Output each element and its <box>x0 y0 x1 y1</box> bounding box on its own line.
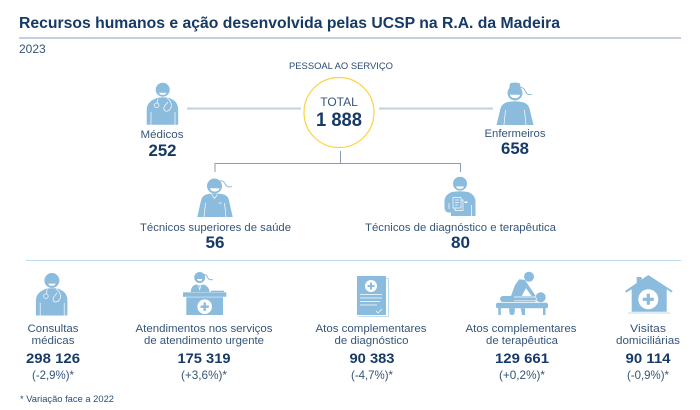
node: médicos: Médicos <box>140 129 184 141</box>
panel: atos complementares de terapêutica: de terapêutica <box>486 335 559 347</box>
node: técnicos de diagnóstico e terapêutica: 80 <box>451 233 470 252</box>
panel: atos complementares de diagnóstico: (-4,7%)* <box>351 368 393 382</box>
panel: atendimentos urgentes: 175 319 <box>178 350 231 366</box>
panel: consultas médicas: 298 126 <box>26 350 80 366</box>
panel: atendimentos urgentes <box>136 272 273 382</box>
node: médicos: 252 <box>148 141 176 160</box>
panel: atos complementares de diagnóstico: de diagnóstico <box>334 335 408 347</box>
panel: atos complementares de diagnóstico <box>316 276 427 382</box>
panel: visitas domiciliárias: domiciliárias <box>616 335 681 347</box>
panel: atendimentos urgentes: Atendimentos nos serviços <box>136 323 273 335</box>
node: enfermeiros: Enfermeiros <box>484 128 546 140</box>
icon: doctor <box>36 273 67 316</box>
panel: atos complementares de terapêutica: 129 661 <box>495 350 549 366</box>
node: técnicos superiores de saúde <box>140 178 291 252</box>
panel: consultas médicas <box>26 273 80 382</box>
node: técnicos de diagnóstico e terapêutica: Técnicos de diagnóstico e terapêutica <box>365 222 557 234</box>
icon: medical report <box>357 276 388 316</box>
total circle <box>304 78 374 148</box>
total circle: TOTAL <box>320 95 358 109</box>
node: enfermeiros <box>484 83 546 158</box>
node: técnicos superiores de saúde: 56 <box>206 233 224 252</box>
node: técnicos de diagnóstico e terapêutica <box>365 177 557 252</box>
node: técnicos superiores de saúde: Técnicos superiores de saúde <box>140 222 291 234</box>
panel: consultas médicas: médicas <box>32 335 75 347</box>
panel: visitas domiciliárias: 90 114 <box>626 350 671 366</box>
section heading: pessoal ao serviço: PESSOAL AO SERVIÇO <box>289 61 393 72</box>
panel: atos complementares de diagnóstico: Atos complementares <box>316 323 427 335</box>
node: médicos <box>140 83 184 160</box>
panel: atendimentos urgentes: (+3,6%)* <box>181 368 227 382</box>
panel: atos complementares de diagnóstico: 90 383 <box>350 350 395 366</box>
icon: female technician <box>197 178 233 217</box>
panel: atos complementares de terapêutica: Atos complementares <box>466 323 577 335</box>
panel: atos complementares de terapêutica: (+0,2%)* <box>499 368 545 382</box>
icon: nurse <box>496 83 534 125</box>
year: 2023 <box>19 42 46 56</box>
icon: house with medical cross <box>625 275 673 314</box>
panel: visitas domiciliárias: (-0,9%)* <box>627 368 669 382</box>
panel: atendimentos urgentes: de atendimento urgente <box>144 335 264 347</box>
icon: male technician with clipboard <box>444 177 476 216</box>
icon: reception desk <box>183 272 226 315</box>
panel: consultas médicas: (-2,9%)* <box>32 368 74 382</box>
footnote: * Variação face a 2022 <box>20 394 114 405</box>
panel: consultas médicas: Consultas <box>28 323 79 335</box>
panel: atos complementares de terapêutica <box>466 272 577 382</box>
icon: doctor <box>147 83 178 125</box>
total circle: 1 888 <box>316 109 362 131</box>
panel: visitas domiciliárias <box>616 275 681 382</box>
node: enfermeiros: 658 <box>501 139 529 158</box>
title: Recursos humanos e ação desenvolvida pelas UCSP na R.A. da Madeira <box>19 15 560 32</box>
icon: physiotherapy <box>496 272 548 315</box>
panel: visitas domiciliárias: Visitas <box>630 323 667 335</box>
